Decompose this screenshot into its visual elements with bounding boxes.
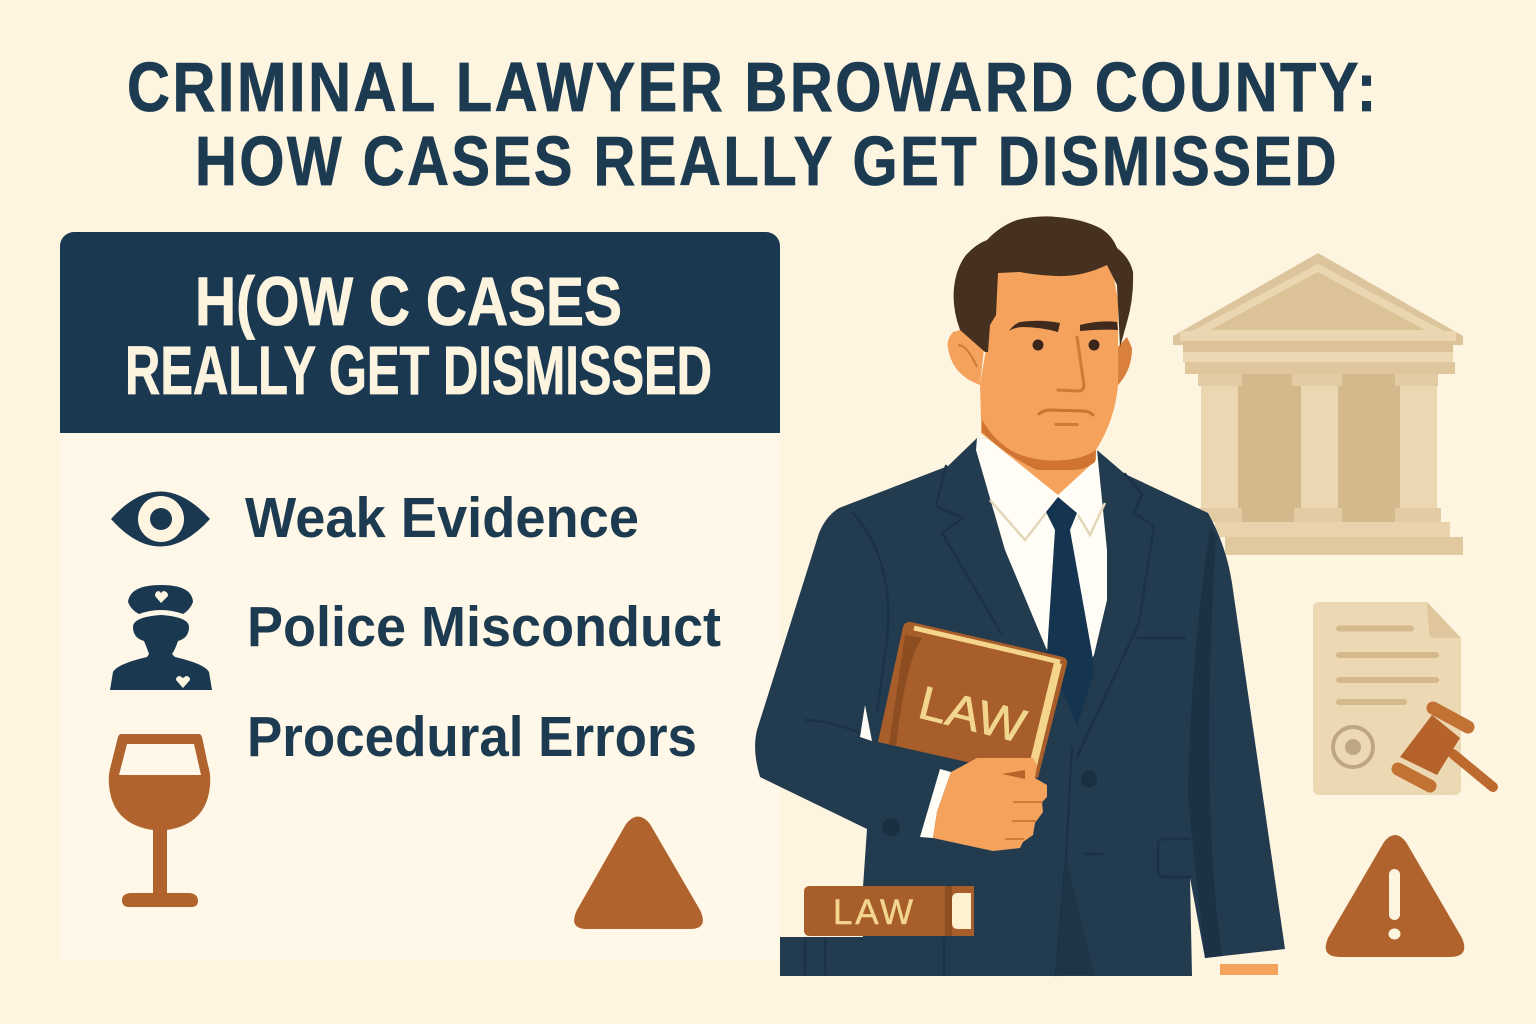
panel: how cases really get dismissed	[60, 232, 780, 960]
lawyer suit	[755, 438, 1285, 976]
lawyer other hand	[1220, 964, 1278, 975]
text: procedural errors: Procedural Errors	[247, 705, 697, 769]
title: HOW CASES REALLY GET DISMISSED	[195, 122, 1339, 200]
large law book: LAW	[914, 675, 1032, 753]
lawyer face	[980, 258, 1118, 470]
text: weak evidence: Weak Evidence	[245, 486, 639, 550]
lawyer neck	[981, 415, 1096, 495]
icon: document with seal	[1313, 602, 1461, 795]
small law book	[804, 886, 974, 936]
icon: police officer	[110, 585, 212, 690]
icon: gavel	[1398, 708, 1493, 787]
lawyer tie	[1046, 497, 1094, 727]
icon: warning triangle	[1326, 835, 1464, 957]
panel heading	[60, 232, 780, 433]
icon: triangle	[574, 816, 703, 929]
illustration: lawyer	[755, 216, 1285, 976]
text: police misconduct: Police Misconduct	[247, 595, 721, 659]
lawyer neck shadow	[982, 420, 1096, 470]
lawyer shirt and collar	[976, 438, 1107, 690]
small law book: LAW	[833, 893, 913, 932]
lawyer hair	[954, 216, 1133, 352]
panel heading: H(OW C CASES	[195, 263, 622, 340]
lawyer ears	[948, 330, 1132, 385]
icon: courthouse	[1173, 253, 1463, 555]
lawyer facial features	[1009, 321, 1118, 424]
bottom book	[780, 937, 945, 976]
icon: eye	[111, 492, 210, 546]
lawyer hand and cuff	[920, 758, 1047, 851]
title	[127, 48, 1379, 200]
large law book	[878, 622, 1067, 778]
icon: wine glass	[109, 734, 210, 907]
panel heading: REALLY GET DISMISSED	[125, 332, 712, 409]
